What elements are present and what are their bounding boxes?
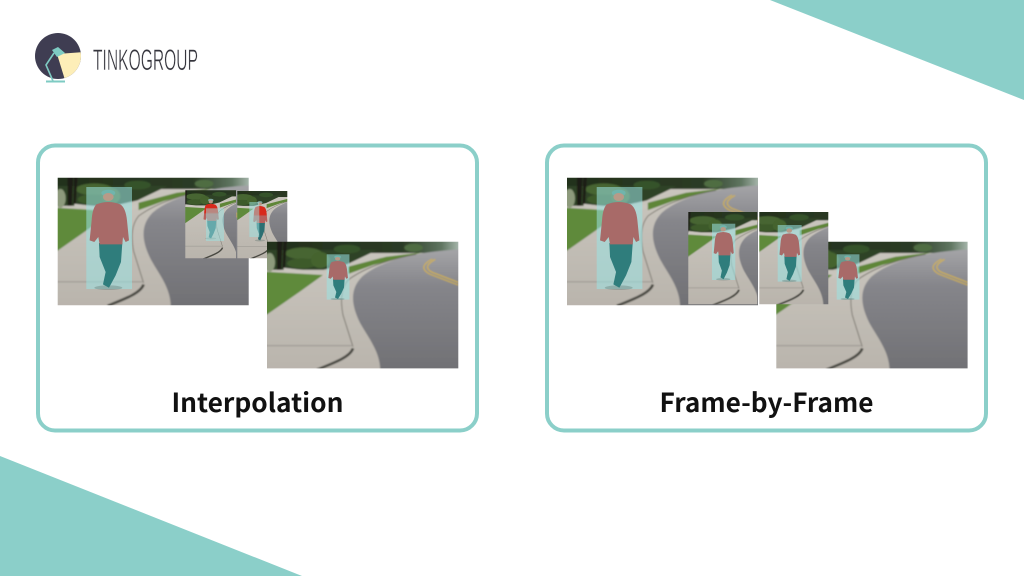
label: Interpolation: Interpolation (172, 383, 344, 420)
frame 2 with red-shirted walker (175, 189, 281, 260)
frame 1 with large walker (564, 175, 761, 307)
frame 4 with small walker (774, 239, 970, 371)
frame 4 with small walker (264, 239, 461, 371)
panel: frame-by-frame (547, 146, 986, 430)
panel: interpolation (38, 146, 477, 430)
frame 3 with red-shirted walker (222, 190, 327, 260)
frame 2 with walker (674, 210, 818, 306)
corner triangle: top right (770, 0, 1024, 100)
brand name: TINKOGROUP (93, 44, 198, 77)
frame 1 with large walker (55, 175, 251, 307)
icon: desk lamp (35, 33, 84, 82)
corner triangle: bottom left (0, 456, 302, 576)
frame 3 with walker (739, 210, 882, 306)
label: Frame-by-Frame: Frame-by-Frame (660, 383, 874, 420)
logo: TINKOGROUP (35, 33, 198, 82)
